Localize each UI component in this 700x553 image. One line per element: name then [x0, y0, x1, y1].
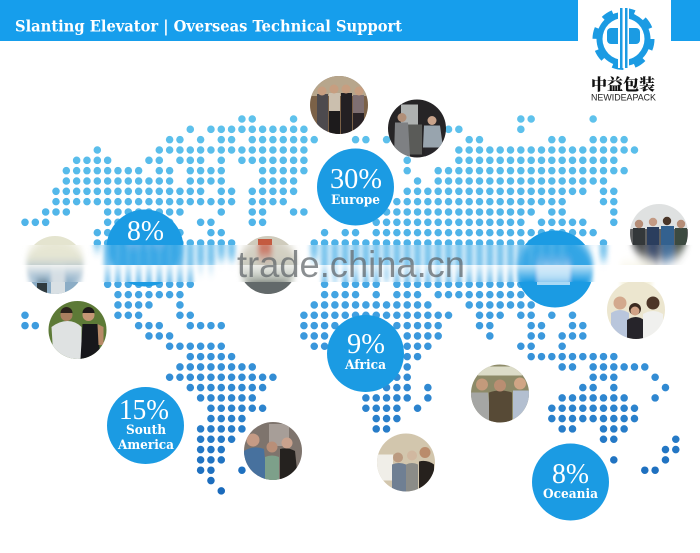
circle: Africa 9% [327, 315, 404, 392]
circle: Oceania 8% [532, 444, 609, 520]
circle: Asia, label obscured [516, 230, 594, 308]
circle: North America 8% [106, 210, 184, 286]
circle: Oceania 8%: 8% [552, 459, 589, 490]
circle: South America 15% [107, 387, 184, 464]
photo: four people, right [630, 204, 688, 262]
header bar left with title [0, 0, 578, 41]
circle: Africa 9%: 9% [347, 329, 385, 360]
circle: South America 15%: South [126, 423, 167, 438]
circle: Oceania 8%: Oceania [543, 487, 599, 502]
circle: Europe 30%: 30% [330, 164, 382, 195]
circle: North America 8%: 8% [127, 216, 164, 247]
photo: two men with machine [388, 100, 446, 158]
pale smear above right portrait [621, 265, 652, 289]
photo: three men in suits [471, 364, 529, 422]
photo: group in front of machine, top [310, 76, 368, 135]
photo: three people with machinery [244, 422, 302, 480]
lower blurred watermark band [25, 265, 654, 282]
upper blurred watermark band [24, 245, 690, 265]
header bar right [671, 0, 700, 41]
photo: two men outdoors [48, 301, 106, 359]
circle: South America 15%: America [117, 438, 175, 453]
icon: gear [595, 8, 652, 68]
photo: obscured group, centre left [239, 236, 297, 295]
circle: Africa 9%: Africa [344, 358, 387, 373]
photo: group in workshop [377, 434, 435, 492]
header bar left with title: Slanting Elevator | Overseas Technical Support [15, 16, 403, 36]
photo: obscured portrait, left [26, 236, 84, 297]
logo English name: NEWIDEAPACK [591, 92, 657, 104]
dotted world map [25, 119, 676, 491]
photo: three people, right [607, 281, 665, 339]
circle: Europe 30% [317, 148, 394, 226]
scene: map with circles and photos [25, 76, 688, 520]
circle: Europe 30%: Europe [331, 193, 380, 208]
logo [591, 8, 657, 104]
watermark text: trade.china.cn [237, 244, 465, 285]
circle: South America 15%: 15% [119, 395, 169, 426]
logo Chinese name: 中益包装 [591, 72, 655, 95]
